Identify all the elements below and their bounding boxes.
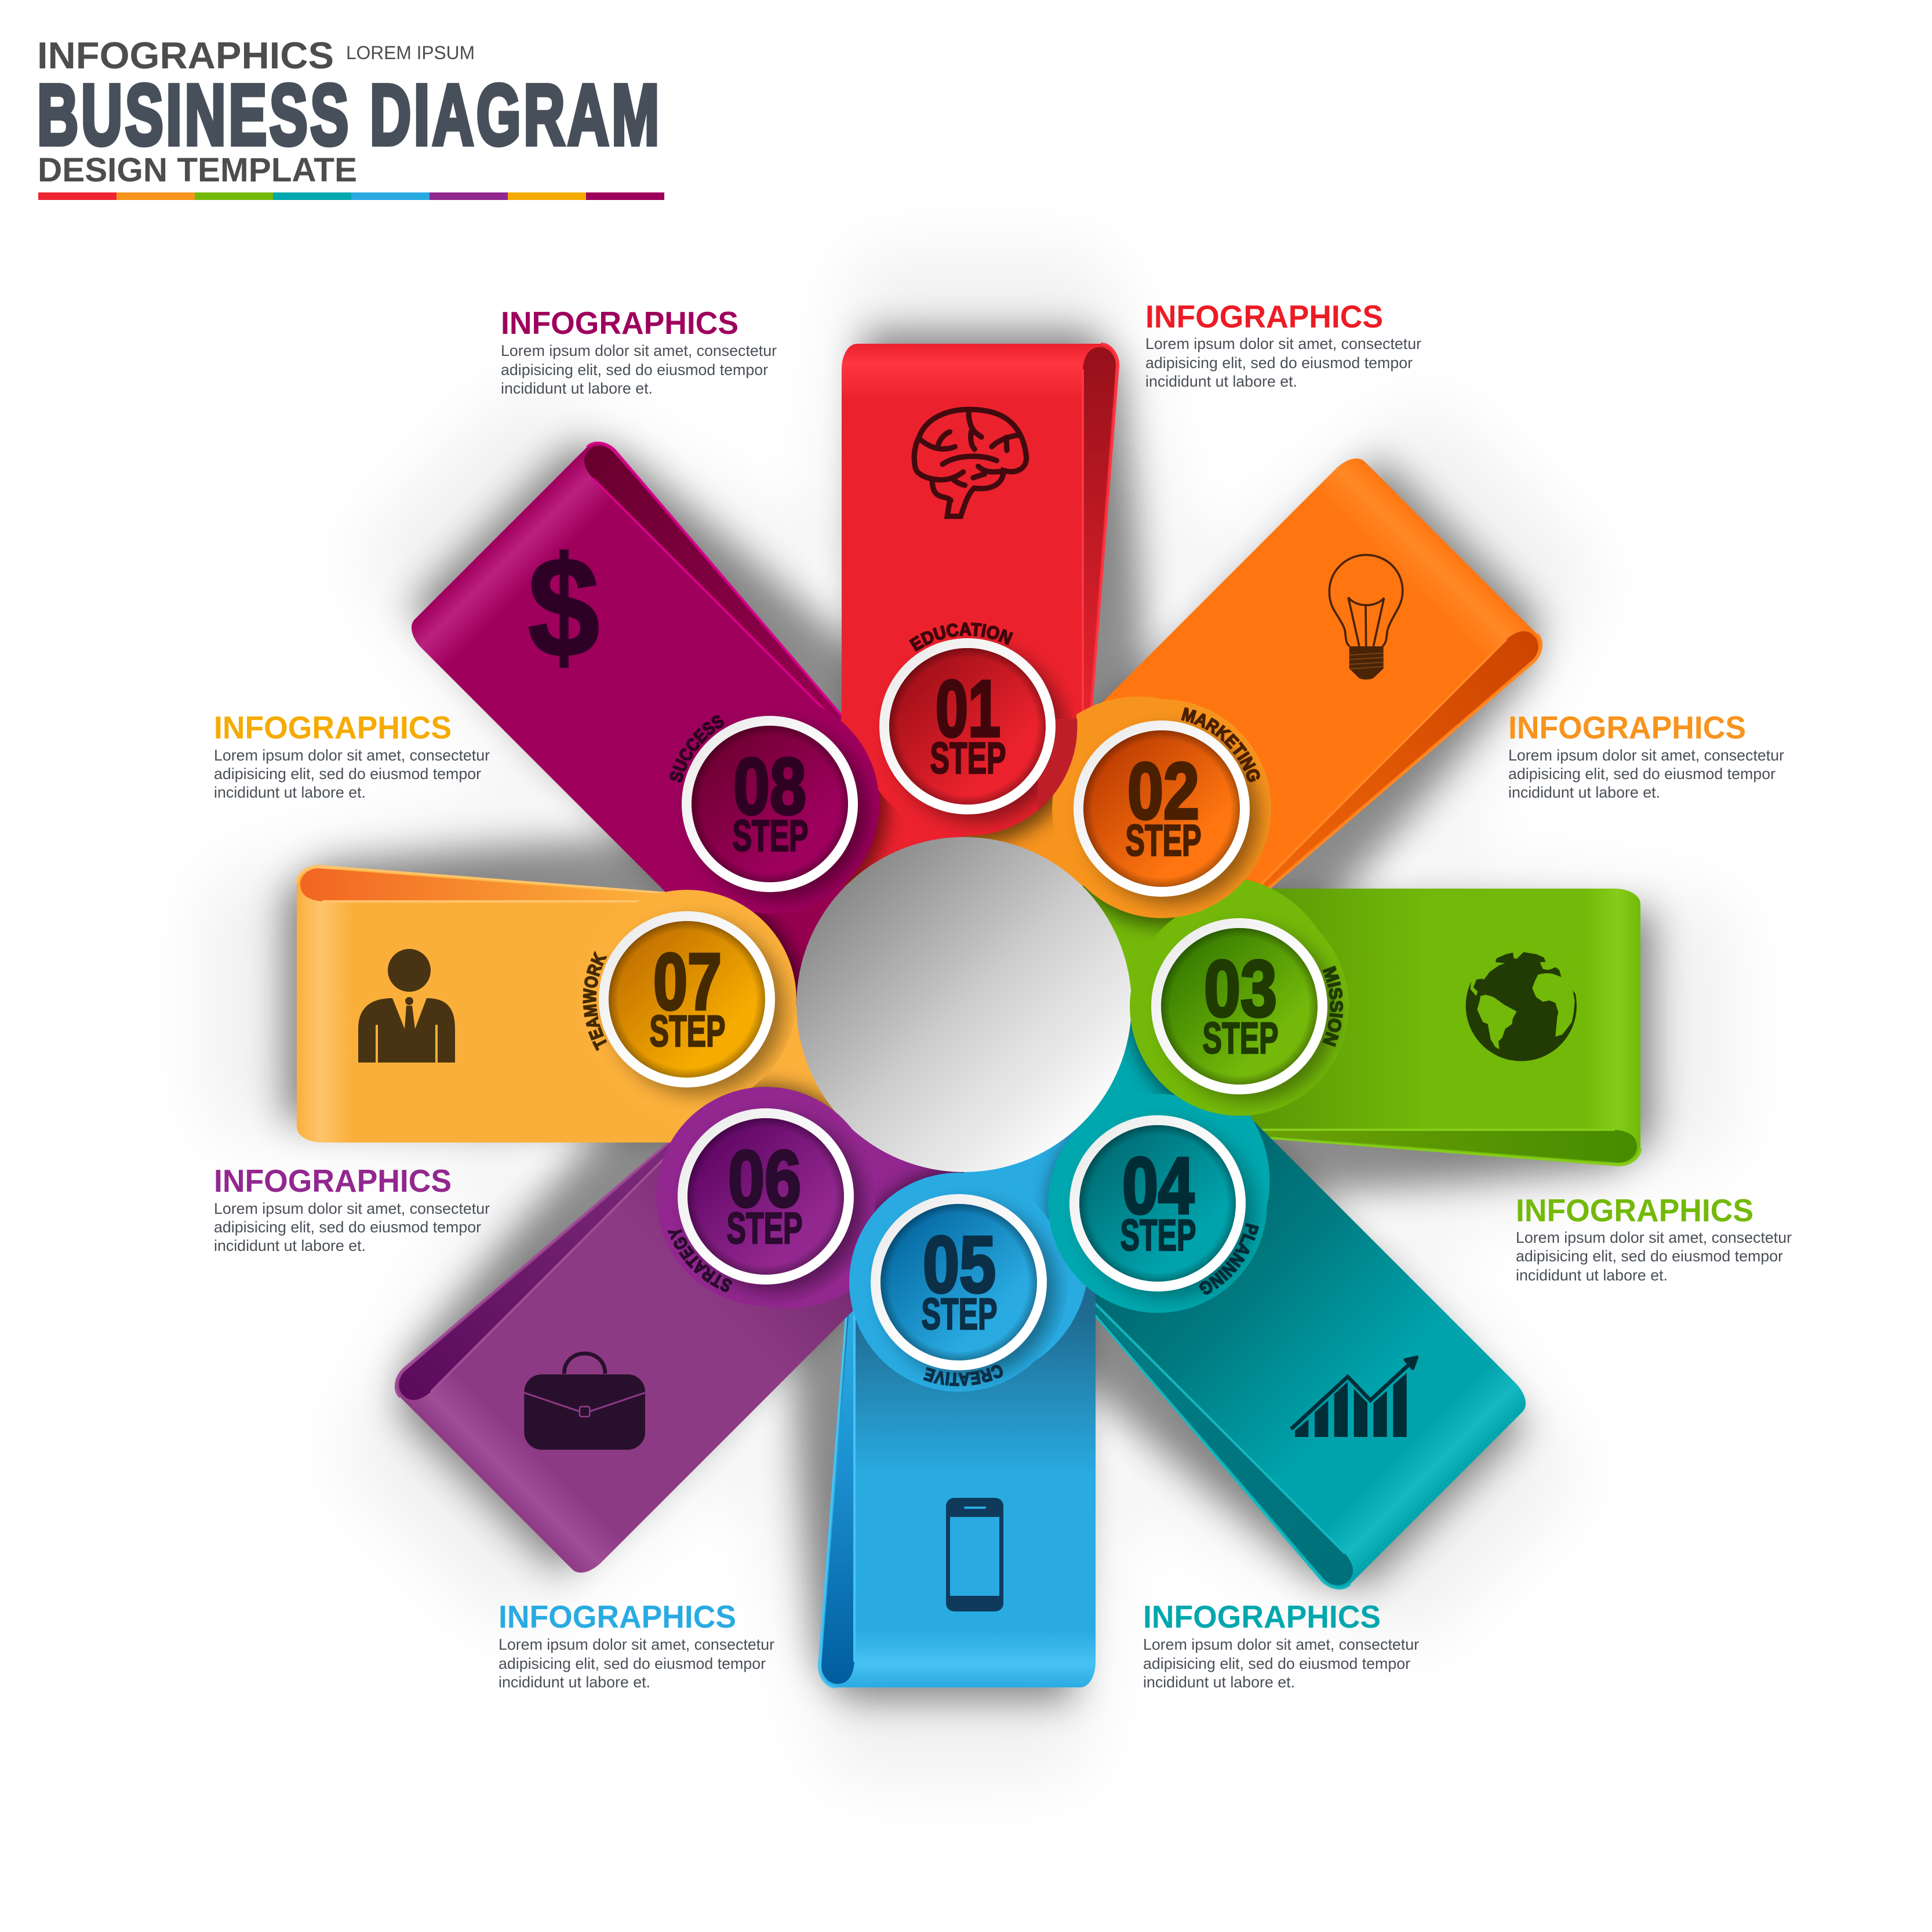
text block: step 08: Lorem ipsum dolor sit amet, consectetur: [501, 342, 777, 359]
step 03 disc: STEP: [1202, 1014, 1279, 1063]
disc teardrop extensions: [589, 628, 1337, 1380]
text block: step 01: [1145, 299, 1421, 390]
text block: step 03: INFOGRAPHICS: [1516, 1192, 1753, 1228]
icon: dollar sign: $: [528, 527, 599, 686]
text block: step 01: adipisicing elit, sed do eiusmod tempor: [1145, 354, 1413, 372]
text block: step 04: Lorem ipsum dolor sit amet, consectetur: [1143, 1636, 1419, 1653]
text block: step 05: INFOGRAPHICS: [499, 1599, 736, 1635]
step 06 disc: [656, 1087, 875, 1306]
step 07 disc: TEAMWORK: [583, 951, 607, 1051]
step 04 disc: [1048, 1094, 1271, 1313]
main title: BUSINESS DIAGRAM: [37, 67, 662, 163]
heading: infographics: INFOGRAPHICS: [37, 34, 334, 77]
text block: step 04: [1143, 1599, 1419, 1691]
text block: step 07: INFOGRAPHICS: [214, 710, 452, 745]
ribbon 06 purple: [388, 1054, 914, 1580]
text block: step 03: Lorem ipsum dolor sit amet, consectetur: [1516, 1229, 1792, 1246]
step 01 disc: [861, 623, 1077, 836]
text block: step 04: adipisicing elit, sed do eiusmod tempor: [1143, 1655, 1410, 1672]
text block: step 06: [214, 1163, 490, 1254]
step 05 disc: STEP: [922, 1290, 997, 1339]
text block: step 05: incididunt ut labore et.: [499, 1673, 650, 1691]
text block: step 04: incididunt ut labore et.: [1143, 1673, 1295, 1691]
text block: step 03: [1516, 1192, 1792, 1284]
text block: step 02: incididunt ut labore et.: [1508, 784, 1660, 801]
text block: step 07: adipisicing elit, sed do eiusmod tempor: [214, 765, 481, 783]
text block: step 06: adipisicing elit, sed do eiusmod tempor: [214, 1218, 481, 1236]
text block: step 07: [214, 710, 490, 801]
step 08 disc: [670, 706, 879, 914]
step 05 disc: 05: [923, 1220, 996, 1309]
step 05 disc: CREATIVE: [920, 1359, 1007, 1392]
ribbon 03 green: [1173, 889, 1640, 1165]
ribbon 07 yellow: [297, 866, 765, 1143]
step 03 disc: MISSION: [1319, 964, 1347, 1049]
step 02 disc: STEP: [1126, 816, 1201, 865]
text block: step 02: [1508, 710, 1784, 801]
subtitle: DESIGN TEMPLATE: [38, 151, 357, 189]
ribbon shadows: [208, 255, 1729, 1776]
step 03 disc: [1130, 897, 1349, 1116]
ribbon 01 red: [842, 344, 1118, 812]
text block: step 04: INFOGRAPHICS: [1143, 1599, 1381, 1635]
step 08 disc: STEP: [733, 812, 808, 861]
step 01 disc: EDUCATION: [909, 623, 1013, 652]
text block: step 02: Lorem ipsum dolor sit amet, consectetur: [1508, 747, 1784, 764]
step 04 disc: 04: [1122, 1141, 1194, 1231]
text block: step 01: incididunt ut labore et.: [1145, 373, 1297, 390]
step 03 disc: 03: [1204, 944, 1277, 1034]
text block: step 03: adipisicing elit, sed do eiusmod tempor: [1516, 1247, 1783, 1265]
ribbon 04 teal: [1007, 1070, 1533, 1596]
disc 01 overlap patch: [868, 627, 1067, 825]
step 07 disc: 07: [653, 937, 722, 1027]
step 02 disc: MARKETING: [1173, 693, 1275, 791]
text block: step 02: adipisicing elit, sed do eiusmod tempor: [1508, 765, 1775, 783]
step 07 disc: STEP: [649, 1007, 726, 1056]
text block: step 07: Lorem ipsum dolor sit amet, consectetur: [214, 747, 490, 764]
step 06 disc: STRATEGY: [657, 1219, 740, 1303]
step 08 disc: 08: [733, 742, 806, 831]
text block: step 05: [499, 1599, 774, 1691]
icon: smartphone: [946, 1498, 1003, 1611]
step 04 disc: PLANNING: [1191, 1215, 1271, 1306]
ribbon 05 blue: [819, 1220, 1096, 1687]
text block: step 06: Lorem ipsum dolor sit amet, consectetur: [214, 1200, 490, 1217]
header: title block: [37, 34, 664, 200]
step 01 disc: STEP: [930, 734, 1006, 783]
icon: briefcase: [524, 1354, 645, 1450]
step 06 disc: STEP: [727, 1204, 802, 1253]
text block: step 01: Lorem ipsum dolor sit amet, consectetur: [1145, 335, 1421, 352]
text block: step 06: incididunt ut labore et.: [214, 1237, 366, 1254]
red ribbon overlap over magenta fold: [842, 667, 876, 765]
text block: step 06: INFOGRAPHICS: [214, 1163, 452, 1199]
step 01 disc: 01: [936, 664, 1000, 754]
step 02 disc: [1052, 693, 1275, 918]
icon: business person: [358, 949, 455, 1063]
text block: step 02: INFOGRAPHICS: [1508, 710, 1746, 745]
tails around hole: [577, 618, 1356, 1395]
step 05 disc: [849, 1173, 1068, 1392]
text block: step 08: adipisicing elit, sed do eiusmod tempor: [501, 361, 768, 379]
icon: brain: [914, 409, 1027, 516]
ribbon 02 orange: [1023, 451, 1549, 977]
text block: step 07: incididunt ut labore et.: [214, 784, 366, 801]
icon: globe: [1462, 947, 1584, 1061]
ribbon 08 magenta: [404, 435, 930, 961]
text block: step 03: incididunt ut labore et.: [1516, 1267, 1668, 1284]
text block: step 08: incididunt ut labore et.: [501, 380, 653, 397]
sub label: lorem ipsum: LOREM IPSUM: [346, 42, 475, 63]
text block: step 05: adipisicing elit, sed do eiusmod tempor: [499, 1655, 766, 1672]
icon: growth chart: [1291, 1355, 1418, 1437]
text block: step 05: Lorem ipsum dolor sit amet, consectetur: [499, 1636, 774, 1653]
step 06 disc: 06: [728, 1134, 801, 1224]
step 04 disc: STEP: [1120, 1211, 1196, 1260]
text block: step 08: [501, 305, 777, 397]
step 07 disc: [583, 890, 796, 1106]
center hole: [796, 837, 1131, 1172]
colour bar: [38, 192, 664, 200]
icon: light bulb: [1329, 555, 1403, 679]
step 08 disc: SUCCESS: [670, 715, 725, 783]
text block: step 08: INFOGRAPHICS: [501, 305, 738, 341]
text block: step 01: INFOGRAPHICS: [1145, 299, 1383, 334]
step 02 disc: 02: [1127, 747, 1199, 836]
